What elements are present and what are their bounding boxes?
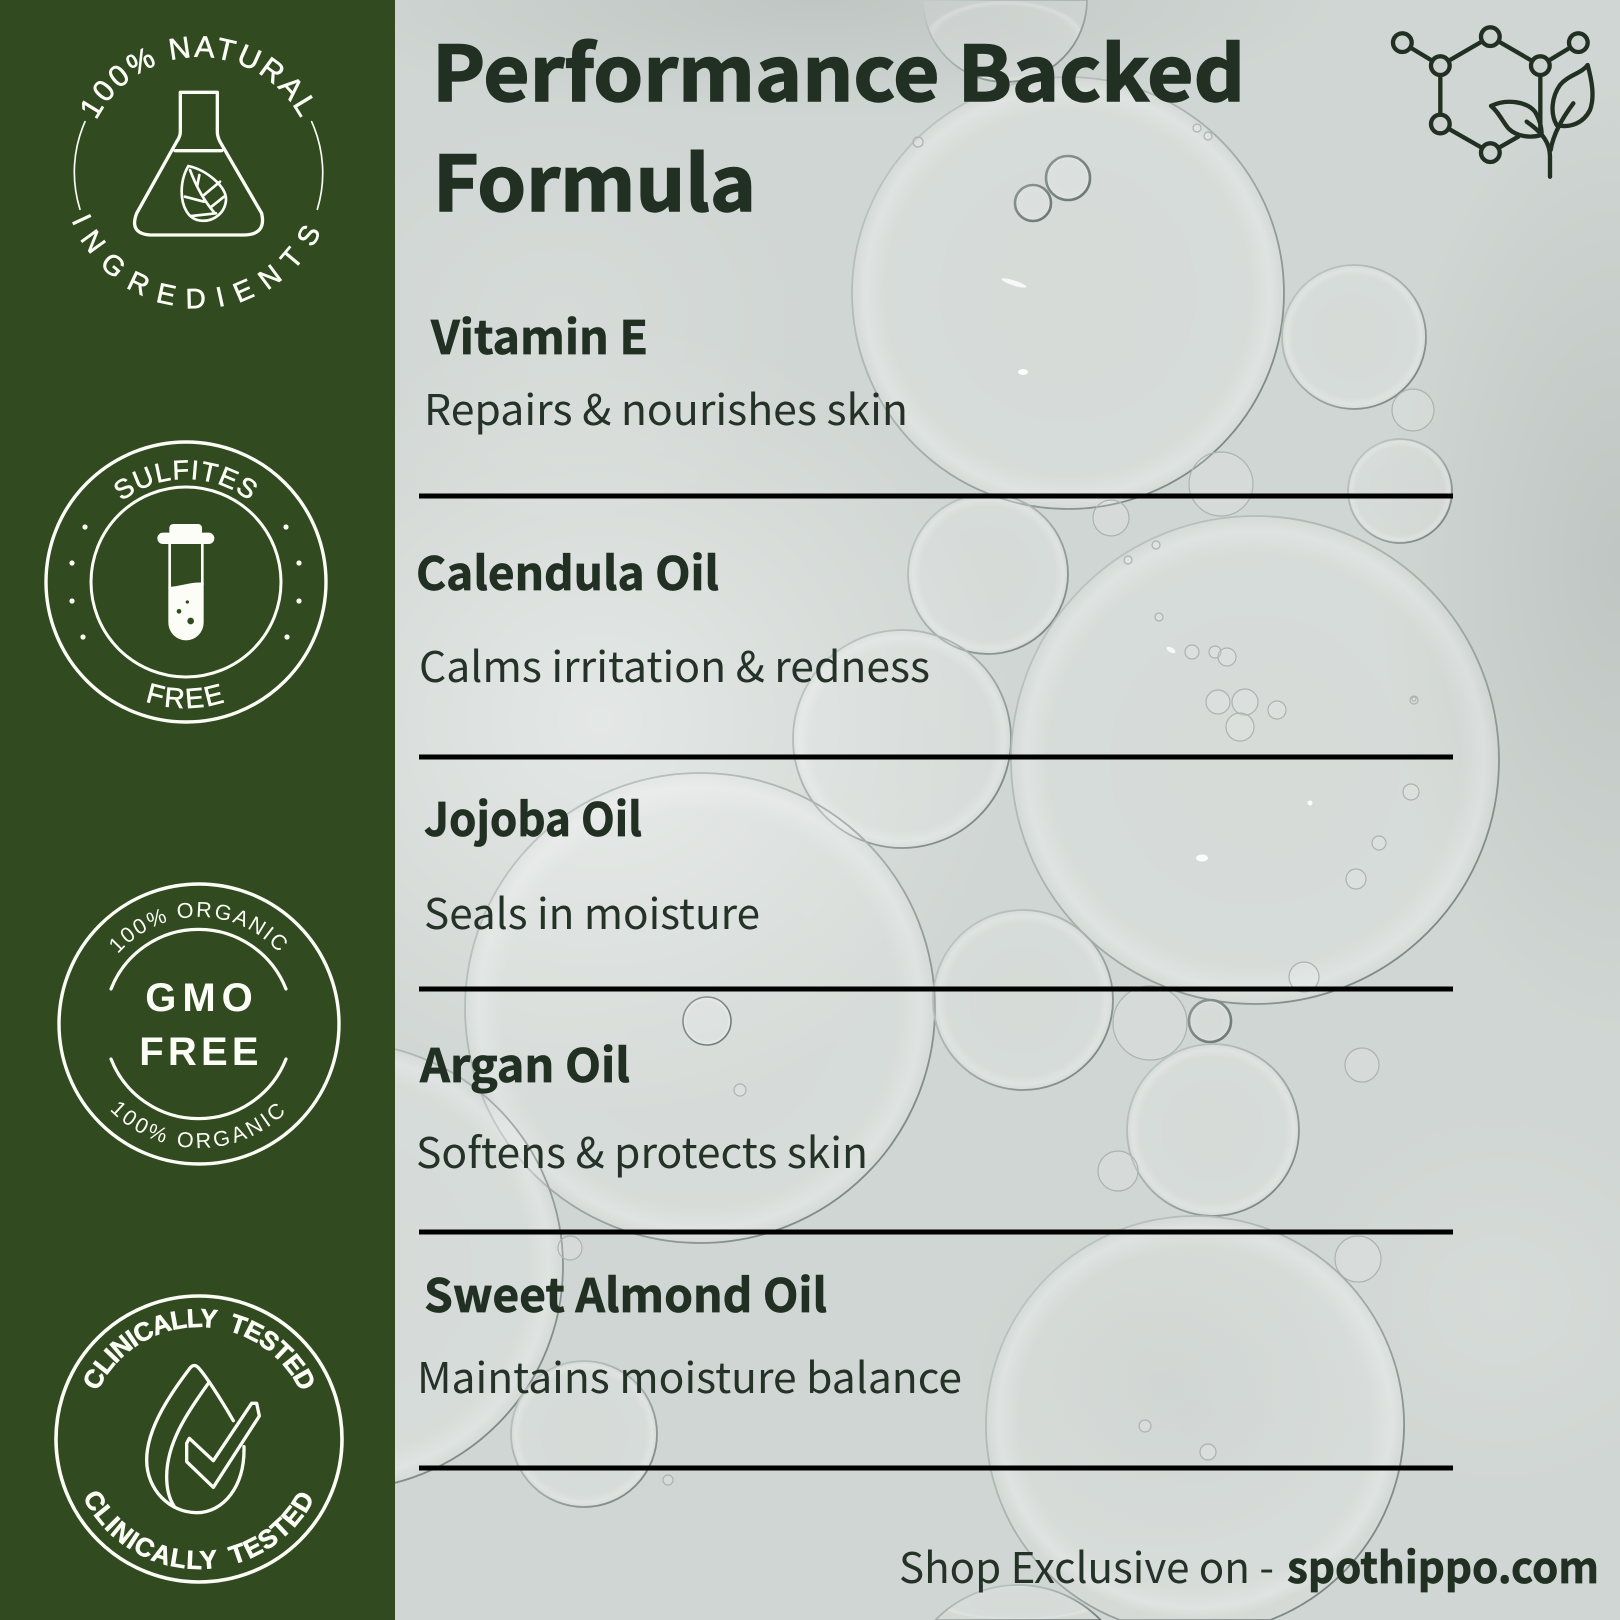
badge rings <box>59 884 339 1164</box>
footer: shop link: Shop Exclusive on - <box>899 1535 1274 1596</box>
title: Performance Backed <box>432 13 1245 123</box>
footer: shop link: spothippo.com <box>1287 1534 1599 1596</box>
ingredient: vitamin E <box>424 302 908 438</box>
badge rings <box>46 442 326 722</box>
ingredient: argan oil <box>416 1030 868 1181</box>
ingredient: sweet almond oil: Sweet Almond Oil <box>424 1260 827 1326</box>
badge: sulfites free <box>44 440 328 724</box>
left green sidebar <box>0 0 395 1620</box>
badge text: bottom: FREE <box>146 683 224 708</box>
title <box>432 13 1245 233</box>
ingredient: calendula oil <box>416 538 930 695</box>
ingredient: jojoba oil: Jojoba Oil <box>424 784 642 850</box>
tiny droplets <box>558 124 1419 1485</box>
badge text: FREE: FREE <box>139 1030 263 1074</box>
ingredient: argan oil: Argan Oil <box>419 1030 630 1096</box>
badge text: bottom: INGREDIENTS <box>72 214 320 309</box>
badge text: bottom: 100% ORGANIC <box>110 1102 284 1148</box>
title: Formula <box>433 123 756 233</box>
icon: test tube <box>157 524 214 640</box>
badge ring <box>56 1296 342 1582</box>
ingredient: jojoba oil: Seals in moisture <box>424 881 760 942</box>
badge text: top: SULFITES <box>114 460 257 499</box>
icon: drop with check mark <box>147 1365 259 1513</box>
ingredient: calendula oil: Calendula Oil <box>416 538 719 604</box>
badge: 100% natural ingredients <box>72 36 324 309</box>
icon: flask with leaf <box>74 92 323 235</box>
ingredient: jojoba oil <box>424 784 760 942</box>
ingredient: vitamin E: Vitamin E <box>430 302 648 368</box>
badge: clinically tested <box>54 1294 344 1584</box>
badge text: top: 100% ORGANIC <box>110 902 287 953</box>
ingredient: sweet almond oil <box>417 1260 962 1406</box>
highlights <box>1001 277 1312 862</box>
footer: shop link <box>899 1534 1599 1596</box>
badge dots <box>69 524 302 640</box>
badge text: top: 100% NATURAL <box>82 36 313 119</box>
ingredient: calendula oil: Calms irritation & redness <box>419 634 930 695</box>
ingredient: sweet almond oil: Maintains moisture balance <box>417 1345 962 1406</box>
icon: molecule with plant <box>1393 27 1593 177</box>
badge text: top: CLINICALLY TESTED <box>84 1308 314 1388</box>
ingredient: vitamin E: Repairs & nourishes skin <box>424 377 908 438</box>
badge text: bottom: CLINICALLY TESTED <box>86 1491 312 1570</box>
ingredient: argan oil: Softens & protects skin <box>416 1120 868 1181</box>
badge text: GMO: GMO <box>145 976 259 1020</box>
badge: GMO free <box>57 882 341 1166</box>
